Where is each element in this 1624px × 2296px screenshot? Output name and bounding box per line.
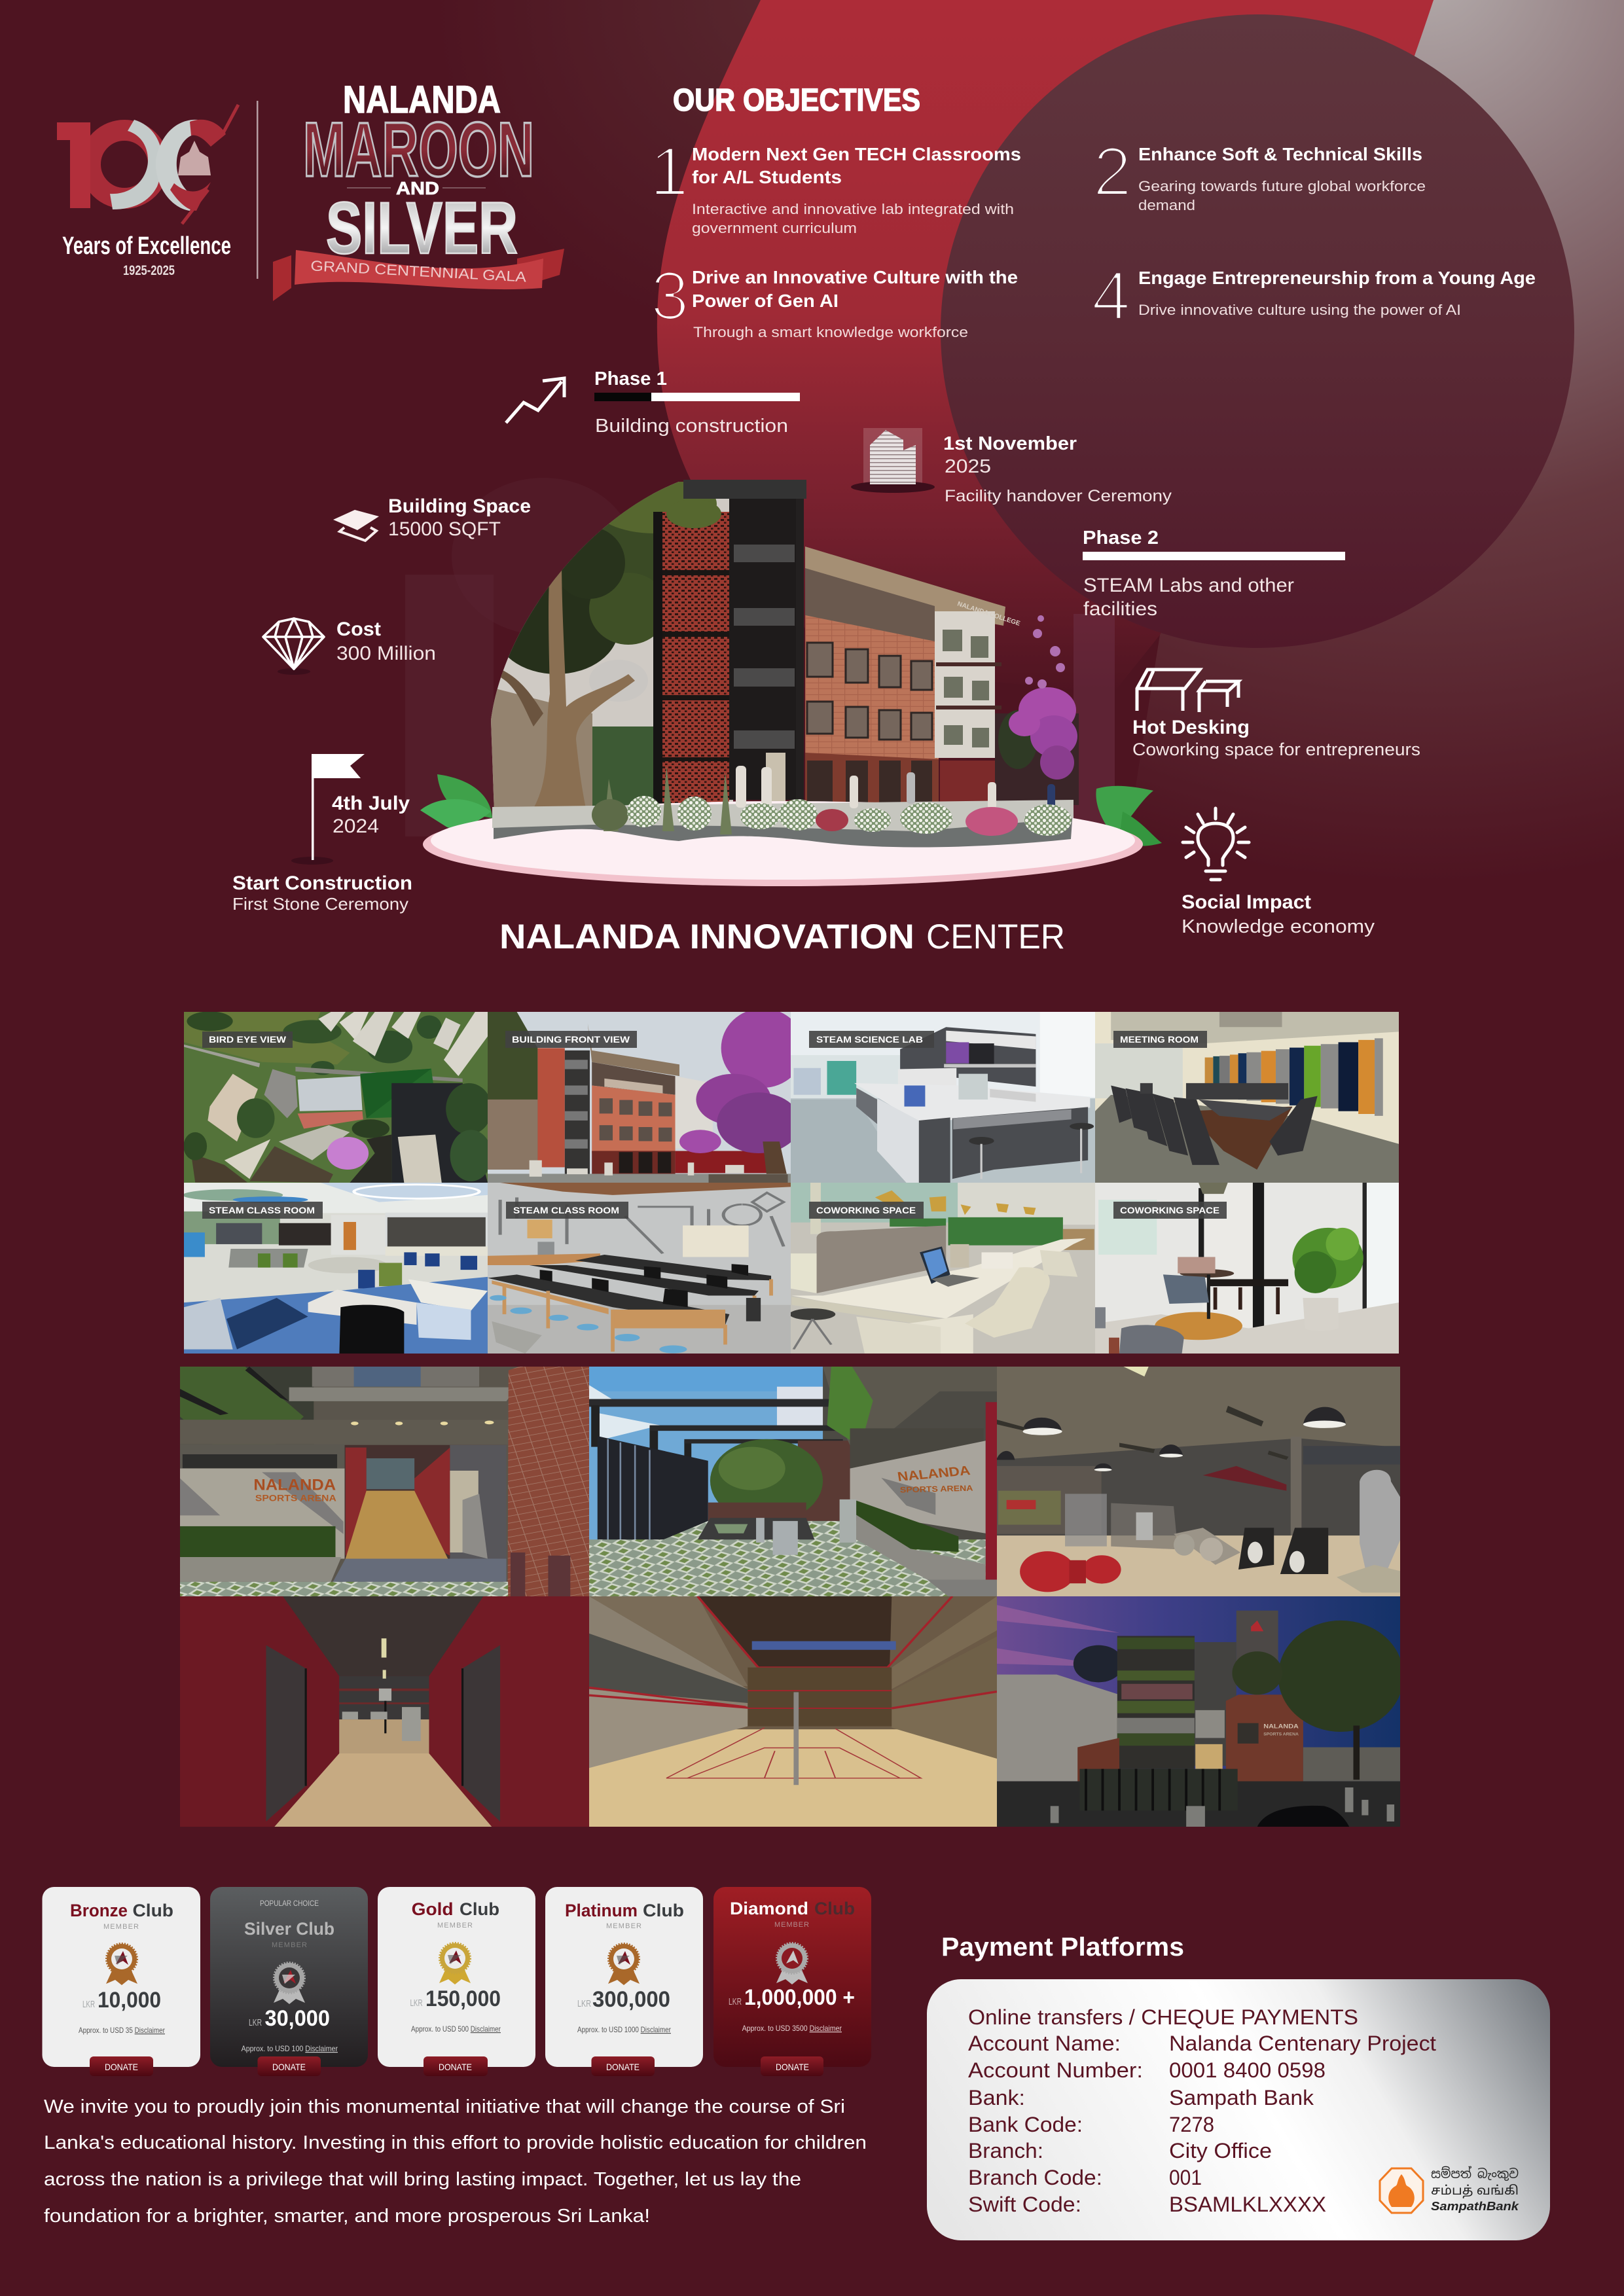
panel: gold club card <box>378 1887 535 2076</box>
panel: diamond club card: LKR <box>729 1996 742 2007</box>
objective 1 <box>650 134 1021 236</box>
logo: sampath bank <box>1380 2166 1519 2213</box>
background dark circle <box>941 14 1574 648</box>
objective 3 <box>651 258 1018 340</box>
phase 2: facilities <box>1083 598 1157 620</box>
label chip: COWORKING SPACE <box>1120 1205 1219 1215</box>
panel: bank details card: Account Number: <box>968 2058 1143 2082</box>
panel: bank details card: Bank Code: <box>968 2113 1083 2136</box>
panel: gold club card: LKR <box>410 1998 423 2009</box>
people <box>736 766 1055 810</box>
icon: diamond medal <box>776 1943 808 1984</box>
objective 2: Enhance Soft & Technical Skills <box>1138 144 1422 164</box>
panel: silver club card: Silver Club <box>244 1919 334 1939</box>
panel: gold club card: Club <box>460 1899 499 1919</box>
progress bar phase 1 <box>594 393 800 401</box>
handover date: 1st November <box>943 433 1077 454</box>
panel: bank details card: Bank: <box>968 2086 1025 2109</box>
button: donate: DONATE <box>776 2062 809 2072</box>
icon: tower block <box>851 428 935 493</box>
panel: gold club card: Gold <box>412 1899 454 1919</box>
photo: sports arena courtyard: NALANDA <box>896 1463 971 1484</box>
button: donate <box>424 2056 488 2076</box>
arch backdrop with tree <box>491 482 733 807</box>
label chip <box>506 1202 628 1219</box>
panel: diamond club card: Diamond <box>730 1899 808 1918</box>
panel: bronze club card: Approx. to USD 35 Disclaimer <box>79 2026 165 2035</box>
objective 1: for A/L Students <box>692 167 842 187</box>
panel: bronze club card: Club <box>132 1901 173 1920</box>
objectives section <box>650 83 1536 340</box>
panel: bank details card: BSAMLKLXXXX <box>1169 2193 1326 2216</box>
text: years of excellence: Years of Excellence <box>62 232 231 260</box>
objective 3: Through a smart knowledge workforce <box>693 324 968 340</box>
text: nalanda: NALANDA <box>343 79 501 121</box>
photo: building front view <box>488 1009 804 1183</box>
objective 4: 4 <box>1092 258 1130 334</box>
icon: layers <box>333 510 379 541</box>
panel: bronze club card: 10,000 <box>98 1988 161 2013</box>
panel: bank details card: Sampath Bank <box>1169 2086 1314 2109</box>
photo: sports arena entrance <box>180 1367 589 1596</box>
button: donate <box>258 2056 321 2076</box>
panel: bank details card: Account Name: <box>968 2032 1121 2055</box>
white side block: NALANDA COLLEGE <box>956 600 1021 628</box>
faded background trees <box>405 478 1115 836</box>
panel: diamond club card: 1,000,000 + <box>744 1985 855 2010</box>
hot desking text: Hot Desking <box>1132 717 1250 738</box>
label chip <box>505 1031 637 1048</box>
panel: bank details card: 0001 8400 0598 <box>1169 2058 1326 2082</box>
handover date: Facility handover Ceremony <box>945 487 1172 505</box>
heading: our objectives: OUR OBJECTIVES <box>673 83 920 118</box>
logo: 100 years of excellence <box>57 105 238 278</box>
background glow top left <box>432 0 890 340</box>
handover date: 2025 <box>945 456 991 477</box>
objective 2: demand <box>1138 197 1195 213</box>
logo: maroon and silver gala <box>273 79 564 301</box>
button: donate <box>90 2056 153 2076</box>
logo: sampath bank: සම්පත් බැංකුව <box>1431 2166 1519 2182</box>
icon: 100 mark <box>57 105 238 224</box>
label chip <box>202 1031 293 1048</box>
banner ribbon <box>273 249 564 301</box>
panel: diamond club card: Approx. to USD 3500 Disclaimer <box>742 2024 842 2033</box>
panel: bank details card: Swift Code: <box>968 2193 1081 2216</box>
panel: silver club card: LKR <box>249 2017 262 2028</box>
panel: bank details card <box>927 1979 1550 2240</box>
panel: silver club card: POPULAR CHOICE <box>260 1899 319 1908</box>
panel: bank details card: 001 <box>1169 2166 1202 2189</box>
white side block <box>935 600 1021 805</box>
photo: steam class room 2 <box>488 1183 791 1354</box>
panel: bank details card: City Office <box>1169 2139 1272 2162</box>
title: nalanda innovation center: CENTER <box>926 918 1065 956</box>
leaves right <box>1096 786 1162 846</box>
cost stat <box>336 619 436 664</box>
label chip: STEAM SCIENCE LAB <box>816 1034 923 1045</box>
flowering tree <box>995 615 1079 805</box>
photo: bird eye view <box>183 1011 492 1183</box>
objective 3: 3 <box>651 258 689 334</box>
main brick block <box>805 547 1005 806</box>
hot desking text: Coworking space for entrepreneurs <box>1132 740 1420 759</box>
panel: platinum club card: Platinum <box>565 1901 638 1920</box>
leaves left <box>420 774 492 829</box>
logo: sampath bank: SampathBank <box>1431 2200 1519 2213</box>
panel: gold club card: 150,000 <box>425 1986 501 2011</box>
photo: sports arena courtyard <box>589 1367 997 1596</box>
label chip: MEETING ROOM <box>1120 1034 1199 1045</box>
objective 2: Gearing towards future global workforce <box>1138 178 1426 194</box>
text block: invitation paragraph: Lanka's educational history. Investing in this effort to provide holistic education for children <box>44 2132 867 2153</box>
phase 2: Phase 2 <box>1083 528 1159 548</box>
icon: light bulb <box>1183 808 1249 880</box>
objective 4: Engage Entrepreneurship from a Young Age <box>1138 268 1536 288</box>
panel: platinum club card: Approx. to USD 1000 Disclaimer <box>577 2025 671 2034</box>
panel: platinum club card: Club <box>643 1901 684 1920</box>
text: silver: SILVER <box>326 187 518 269</box>
panel: gold club card: Approx. to USD 500 Disclaimer <box>411 2024 501 2034</box>
text: grand centennial gala: GRAND CENTENNIAL GALA <box>310 257 527 285</box>
text: maroon: MAROON <box>303 107 534 193</box>
panel: platinum club card: 300,000 <box>592 1987 670 2012</box>
label chip: STEAM CLASS ROOM <box>209 1205 315 1215</box>
cost stat: Cost <box>336 619 381 640</box>
photo: meeting room <box>1095 1012 1399 1183</box>
panel: bank details card: Branch Code: <box>968 2166 1102 2189</box>
phase 2: STEAM Labs and other <box>1083 575 1294 596</box>
photo: sports arena night exterior: NALANDA <box>1263 1723 1299 1730</box>
panel: bank details card: Online transfers / CHEQUE PAYMENTS <box>968 2005 1358 2029</box>
hot desking text <box>1132 717 1420 759</box>
icon: platinum medal <box>608 1944 640 1985</box>
phase 1: Phase 1 <box>594 368 667 389</box>
photo: coworking space 1 <box>789 1183 1095 1354</box>
panel: silver club card: 30,000 <box>264 2006 330 2031</box>
photo: gym <box>997 1367 1400 1596</box>
panel: bronze club card: LKR <box>82 1999 95 2010</box>
text: 1925-2025: 1925-2025 <box>123 263 175 278</box>
start date: 2024 <box>333 816 379 837</box>
label chip: STEAM CLASS ROOM <box>513 1205 619 1215</box>
label chip: COWORKING SPACE <box>816 1205 916 1215</box>
social impact text: Knowledge economy <box>1182 916 1375 937</box>
photo: steam class room 1 <box>183 1183 488 1354</box>
start date: Start Construction <box>232 872 412 894</box>
building space stat: 15000 SQFT <box>388 518 501 540</box>
social impact text: Social Impact <box>1182 891 1311 913</box>
objective 1: Interactive and innovative lab integrated with <box>692 201 1014 217</box>
photo: indoor court <box>589 1596 997 1827</box>
platform <box>423 801 1143 886</box>
photo: coworking space 2 <box>1095 1183 1399 1354</box>
text block: invitation paragraph <box>44 2096 867 2227</box>
cost stat: 300 Million <box>336 643 436 664</box>
photo: steam science lab <box>791 1012 1095 1183</box>
icon: hot desks <box>1137 670 1238 712</box>
photo: sports arena entrance: SPORTS ARENA <box>255 1494 336 1503</box>
pavement <box>494 802 1074 848</box>
label chip: BUILDING FRONT VIEW <box>512 1034 630 1045</box>
text block: invitation paragraph: foundation for a brighter, smarter, and more prosperous Sri Lanka! <box>44 2206 650 2227</box>
label chip <box>202 1202 323 1219</box>
objective 1: 1 <box>650 134 688 210</box>
objective 4: Drive innovative culture using the power of AI <box>1138 302 1461 318</box>
button: donate: DONATE <box>439 2062 472 2072</box>
text block: invitation paragraph: We invite you to proudly join this monumental initiative that will change the course of Sri <box>44 2096 845 2117</box>
icon: silver medal <box>274 1963 305 2004</box>
background red swoosh <box>657 0 1434 694</box>
panel: gold club card: MEMBER <box>437 1922 473 1929</box>
panel: silver club card <box>210 1887 368 2076</box>
objective 4 <box>1092 258 1536 334</box>
button: donate: DONATE <box>105 2062 138 2072</box>
shrubs <box>592 766 1072 836</box>
text block: invitation paragraph: across the nation is a privilege that will bring lasting impact. Together, let us lay the <box>44 2169 801 2190</box>
panel: bank details card: Branch: <box>968 2139 1043 2162</box>
photo: sports arena night exterior <box>997 1596 1400 1827</box>
handover date <box>943 433 1172 505</box>
panel: diamond club card: Club <box>814 1899 855 1918</box>
phase 1: Building construction <box>595 416 788 437</box>
icon: gold medal <box>439 1943 471 1984</box>
title: nalanda innovation center: NALANDA INNOVATION <box>499 918 914 956</box>
hero illustration: innovation center building <box>405 475 1162 886</box>
social impact text <box>1182 891 1375 937</box>
objective 3: Drive an Innovative Culture with the <box>692 267 1018 287</box>
start date <box>232 793 412 914</box>
building space stat <box>388 495 531 540</box>
objective 3: Power of Gen AI <box>692 291 839 311</box>
panel: bronze club card: Bronze <box>70 1901 128 1920</box>
building space stat: Building Space <box>388 495 531 517</box>
button: donate: DONATE <box>272 2062 306 2072</box>
logo: sampath bank: சம்பத் வங்கி <box>1431 2183 1519 2200</box>
panel: platinum club card: LKR <box>577 1998 591 2009</box>
button: donate <box>761 2056 823 2076</box>
panel: bank details card: Nalanda Centenary Project <box>1169 2032 1436 2055</box>
objective 2 <box>1093 134 1426 213</box>
photo: red corridor <box>180 1596 589 1827</box>
walkway <box>492 800 1074 831</box>
panel: bank details card: 7278 <box>1169 2113 1214 2136</box>
label chip <box>1113 1031 1207 1048</box>
label chip <box>809 1031 934 1048</box>
panel: bronze club card <box>42 1887 200 2076</box>
button: donate <box>592 2056 655 2076</box>
panel: diamond club card: MEMBER <box>774 1921 809 1929</box>
objective 2: 2 <box>1093 134 1131 210</box>
phase 2 <box>1083 528 1345 620</box>
label chip <box>809 1202 924 1219</box>
objective 1: Modern Next Gen TECH Classrooms <box>692 144 1021 164</box>
start date: 4th July <box>332 793 410 814</box>
text: and: AND <box>396 178 439 198</box>
heading: payment platforms: Payment Platforms <box>941 1933 1184 1962</box>
label chip <box>1113 1202 1227 1219</box>
brick tower <box>653 480 806 806</box>
background grey sweep top right <box>1113 0 1624 929</box>
panel: silver club card: MEMBER <box>272 1941 307 1949</box>
icon: flag <box>291 754 365 865</box>
phase 1 <box>594 368 800 437</box>
start date: First Stone Ceremony <box>232 894 408 914</box>
panel: bronze club card: MEMBER <box>103 1923 139 1931</box>
panel: diamond club card <box>713 1887 871 2076</box>
panel: silver club card: Approx. to USD 100 Disclaimer <box>242 2044 338 2053</box>
title: nalanda innovation center <box>499 918 1065 956</box>
photo: sports arena entrance: NALANDA <box>253 1477 336 1494</box>
photo: sports arena night exterior: SPORTS ARENA <box>1263 1732 1299 1736</box>
objective 1: government curriculum <box>692 220 857 236</box>
label chip: BIRD EYE VIEW <box>209 1034 287 1045</box>
icon: diamond <box>263 619 324 675</box>
panel: platinum club card <box>545 1887 703 2076</box>
icon: bronze medal <box>106 1944 137 1985</box>
panel: platinum club card: MEMBER <box>606 1922 641 1930</box>
icon: growth arrow <box>506 378 564 423</box>
photo: sports arena courtyard: SPORTS ARENA <box>900 1484 973 1495</box>
button: donate: DONATE <box>606 2062 640 2072</box>
